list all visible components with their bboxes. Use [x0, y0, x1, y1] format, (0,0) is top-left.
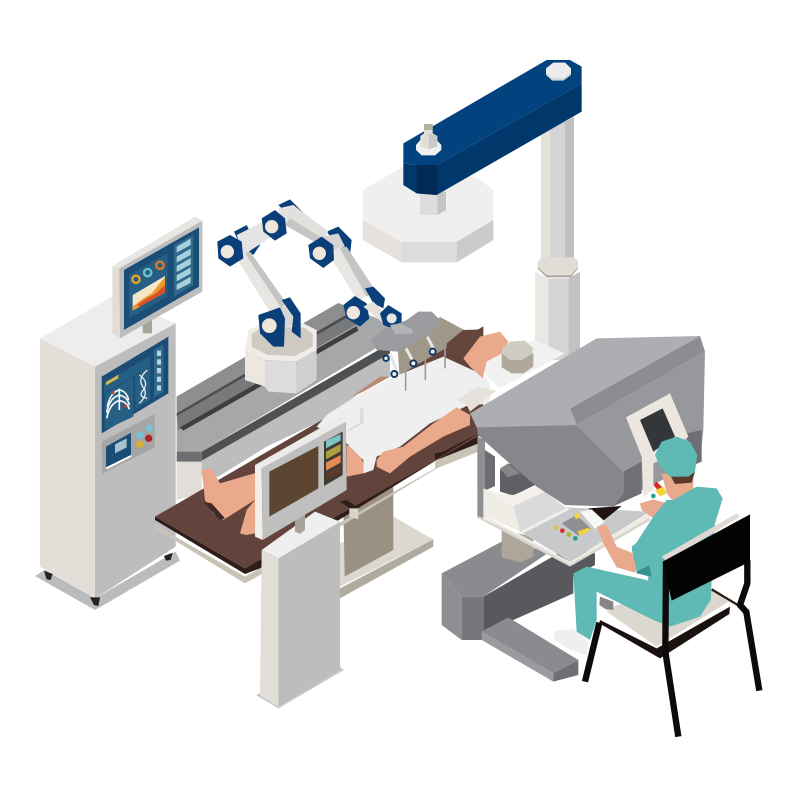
cabinet buttons panel [102, 414, 155, 474]
floor plate [340, 517, 433, 598]
instruments [383, 337, 445, 391]
top joint [262, 210, 287, 241]
control knob [500, 463, 535, 496]
gray rail platform [177, 303, 407, 500]
patient forearm [377, 407, 470, 473]
cabinet body [40, 297, 176, 606]
chair seat edge [599, 607, 730, 658]
trousers [573, 567, 712, 640]
patient head [463, 332, 508, 378]
console desk assembly [477, 437, 650, 567]
bedside monitor pedestal [255, 417, 347, 708]
storage cabinet [35, 217, 202, 610]
surgical table [155, 326, 483, 598]
cabinet screen [102, 337, 168, 433]
arm base [245, 323, 317, 393]
console column [502, 530, 533, 562]
arm rear joints [234, 199, 352, 255]
chair back [663, 514, 750, 601]
chair side rail [712, 589, 742, 607]
scrub top [632, 487, 723, 612]
ribcage icon [107, 389, 129, 418]
foot pedal bar [482, 617, 578, 682]
surgical cap [655, 437, 697, 477]
end joint [380, 305, 402, 328]
lower-right joint [343, 296, 369, 327]
hair [670, 472, 695, 484]
neck [662, 473, 693, 502]
monitor stem [295, 512, 305, 534]
head rest cylinder [502, 341, 533, 373]
white head pad [483, 340, 565, 388]
chair [585, 513, 759, 737]
far hand [640, 499, 667, 518]
console desk [478, 486, 650, 567]
instrument carrier plate [371, 312, 441, 352]
chair front leg and back frame [665, 560, 747, 737]
patient upper arm [352, 377, 390, 397]
lamp pillar [535, 117, 580, 360]
monitor stem [143, 317, 152, 333]
overhead lamp column and arm [363, 60, 582, 360]
navy arm [403, 60, 582, 195]
chair seat [607, 588, 728, 647]
upper monitor [112, 217, 202, 338]
chair rear legs [585, 610, 759, 691]
pedestal [260, 512, 340, 707]
table top [155, 326, 483, 583]
legs and feet [202, 445, 363, 535]
viewer frame [626, 393, 688, 497]
lamp disc [363, 167, 493, 262]
base joint rear plate [282, 297, 301, 338]
end rear joint [365, 287, 385, 308]
DNA icon [139, 370, 147, 403]
desk controls [554, 509, 605, 541]
side controls [651, 482, 667, 498]
surgeon [553, 437, 723, 655]
arm [597, 525, 644, 573]
robotic arm on rail [217, 199, 402, 393]
right joint [308, 237, 334, 268]
pedestal [343, 487, 393, 577]
floor shadow [35, 552, 180, 610]
surgical instrument head [371, 312, 445, 391]
shirt hem [457, 387, 497, 412]
console side post [477, 437, 495, 518]
patient head pad [447, 329, 483, 358]
bedside monitor [255, 417, 347, 540]
arm links [237, 205, 375, 330]
pedestal shadow [256, 667, 344, 708]
console base [442, 542, 595, 682]
console hood [470, 336, 759, 737]
chair back top [662, 513, 740, 562]
base joint [258, 307, 285, 347]
lower-left joint [217, 235, 243, 267]
sheet [317, 357, 490, 473]
end link [363, 302, 393, 323]
shoe [553, 628, 588, 655]
patient [202, 357, 490, 535]
tan rear support behind patient [398, 317, 468, 385]
